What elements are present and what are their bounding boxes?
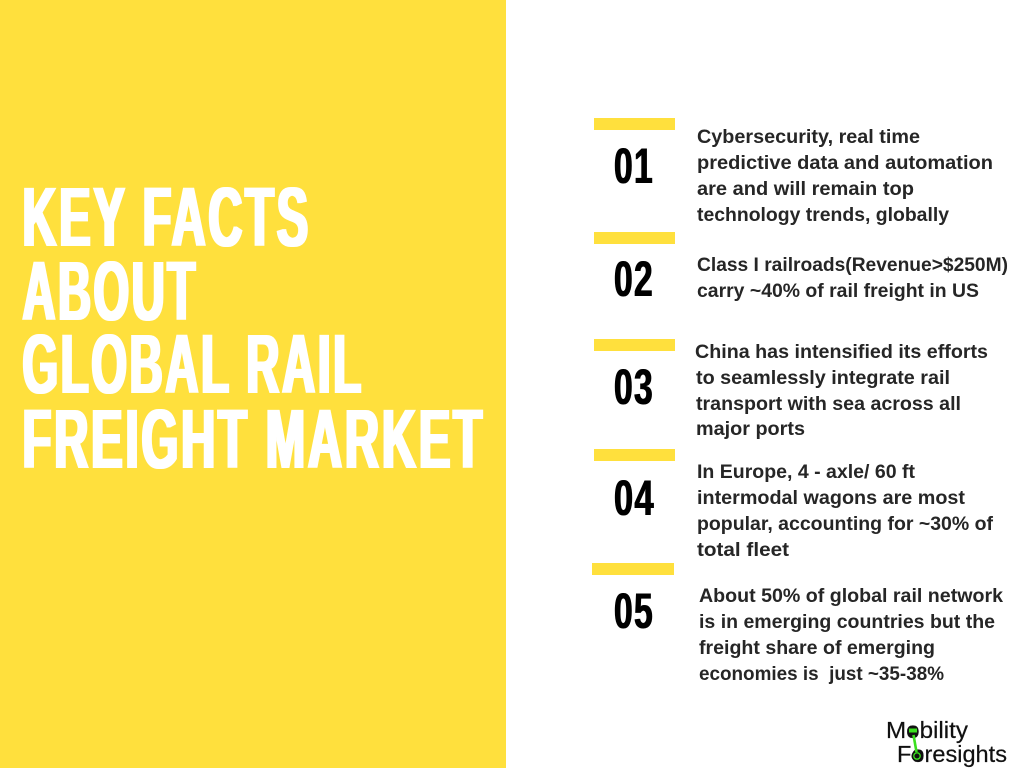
- fact 04: In Europe, 4 - axle/ 60 ft: [697, 461, 915, 483]
- fact 03: China has intensified its efforts: [695, 341, 988, 363]
- fact 02: 02: [614, 251, 654, 307]
- fact 03: to seamlessly integrate rail: [696, 367, 950, 389]
- fact 04: total fleet: [697, 539, 790, 561]
- title: ABOUT: [22, 244, 198, 338]
- fact 04: intermodal wagons are most: [697, 487, 965, 509]
- fact 04: popular, accounting for ~30% of: [697, 513, 994, 535]
- logo: Mobility Foresights: [886, 717, 1007, 767]
- fact 05: About 50% of global rail network: [699, 585, 1003, 607]
- panel: yellow title panel: [0, 0, 506, 768]
- fact 03: transport with sea across all: [696, 393, 961, 415]
- fact 05: economies is just ~35-38%: [699, 663, 944, 685]
- fact 04: 04: [614, 470, 655, 526]
- fact 01: 01: [614, 138, 654, 194]
- title: FREIGHT MARKET: [22, 392, 485, 486]
- fact 04: [594, 449, 994, 561]
- logo: Mobility Foresights: Foresights: [897, 741, 1007, 767]
- fact 03: major ports: [696, 418, 805, 440]
- fact 01: [594, 118, 993, 226]
- fact 05: 05: [614, 583, 654, 639]
- fact 03: 03: [614, 359, 654, 415]
- fact 02: Class I railroads(Revenue>$250M): [697, 254, 1008, 276]
- title: GLOBAL RAIL: [22, 317, 364, 411]
- fact 01: are and will remain top: [697, 178, 914, 200]
- fact 05: freight share of emerging: [699, 637, 935, 659]
- fact 03: [594, 339, 988, 440]
- title: [22, 170, 485, 486]
- fact 01: technology trends, globally: [697, 204, 949, 226]
- fact 05: [592, 563, 1003, 685]
- fact 05: is in emerging countries but the: [699, 611, 995, 633]
- fact 02: carry ~40% of rail freight in US: [697, 280, 979, 302]
- fact 02: [594, 232, 1008, 307]
- fact 01: predictive data and automation: [697, 152, 993, 174]
- logo: Mobility Foresights: Mobility: [886, 717, 968, 743]
- title: KEY FACTS: [22, 170, 311, 264]
- fact 01: Cybersecurity, real time: [697, 126, 920, 148]
